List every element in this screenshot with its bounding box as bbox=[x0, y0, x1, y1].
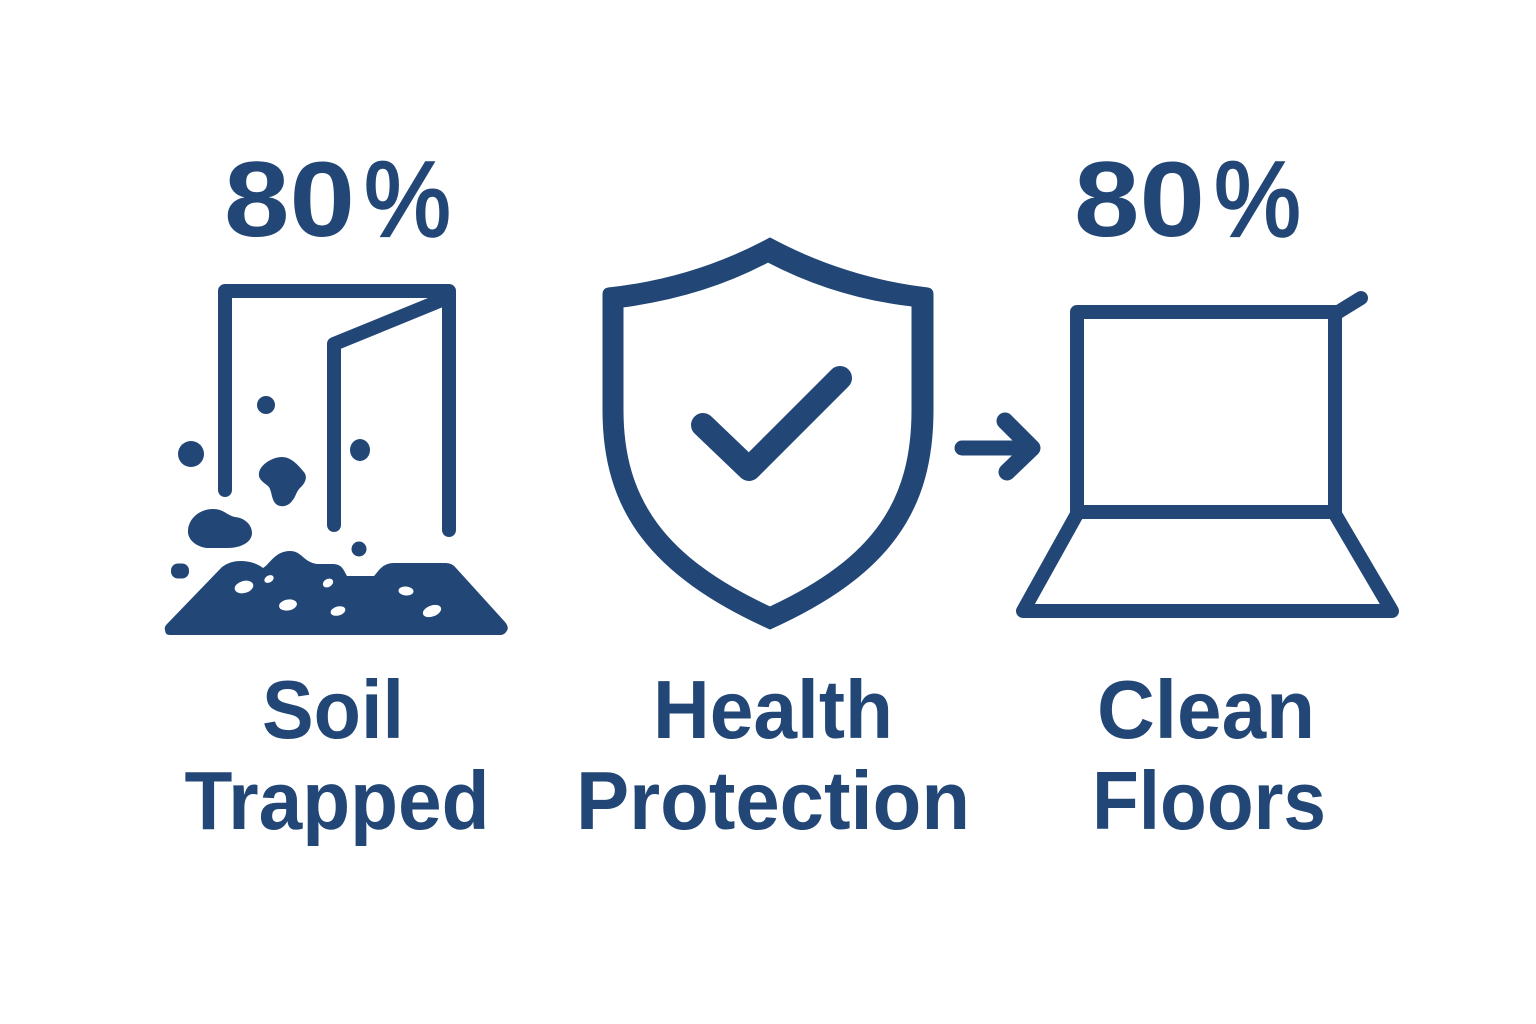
label: Health Protection: Protection bbox=[576, 754, 970, 847]
stat: 80% soil trapped: 80 bbox=[224, 139, 355, 259]
label: Clean Floors: Floors bbox=[1092, 754, 1326, 847]
icon: shield with check mark bbox=[603, 238, 933, 629]
stat: 80% clean floors: % bbox=[1214, 139, 1301, 259]
label: Soil Trapped bbox=[184, 663, 490, 847]
arrow: shield to laptop bbox=[962, 421, 1032, 472]
label: Soil Trapped: Soil bbox=[262, 663, 404, 756]
stat: 80% clean floors: 80 bbox=[1074, 139, 1205, 259]
label: Soil Trapped: Trapped bbox=[184, 754, 490, 847]
icon: laptop outline bbox=[1023, 298, 1392, 611]
label: Clean Floors bbox=[1092, 663, 1326, 847]
label: Clean Floors: Clean bbox=[1097, 663, 1315, 756]
stat: 80% soil trapped: % bbox=[364, 139, 451, 259]
stat: 80% soil trapped bbox=[224, 139, 451, 259]
icon: doorway with falling soil bbox=[165, 291, 508, 635]
stat: 80% clean floors bbox=[1074, 139, 1301, 259]
label: Health Protection bbox=[576, 663, 970, 847]
label: Health Protection: Health bbox=[653, 663, 893, 756]
